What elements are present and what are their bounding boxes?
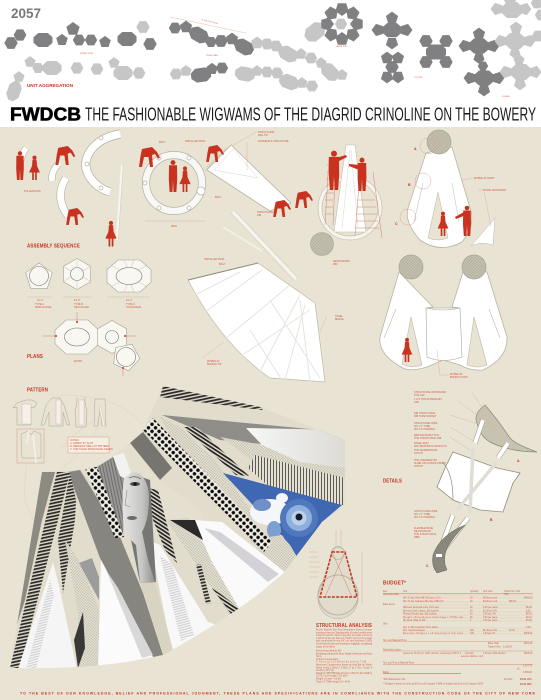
budget table: $480.00 xyxy=(524,598,533,600)
reinforced rim label: RIM xyxy=(333,263,338,266)
plan dimensions and labels: PENTAGONAL xyxy=(35,306,53,309)
details labels: STITCH xyxy=(414,452,423,455)
budget table: x2 xyxy=(517,668,520,670)
details labels: FLEXIBLE BASE xyxy=(414,527,433,530)
structural text block: Trend Specific ratio and resulting is negligible, considering xyxy=(316,642,373,646)
budget table: Fabrication Labor xyxy=(383,648,401,652)
skirt fan pattern: INSTALLED RING xyxy=(204,258,224,261)
plans: three unit plans xyxy=(26,259,151,292)
details labels: RIB STRUCTURAL xyxy=(414,412,436,415)
title: FWDCB xyxy=(10,104,81,124)
details labels: THE STRUCTURAL RIB xyxy=(414,437,442,440)
dark stripes near face xyxy=(150,488,177,563)
pattern note xyxy=(68,437,113,453)
details: shape C xyxy=(432,525,465,573)
pole with woman figure xyxy=(105,165,123,246)
double tent: ZIPPED-IN xyxy=(450,373,463,376)
budget table: 20 xyxy=(470,614,473,616)
skirt fan pattern xyxy=(188,258,344,385)
budget table: 1.00 per 1000 stitches xyxy=(483,652,506,655)
budget table: $1.00 per ON xyxy=(483,629,497,632)
structural diagram xyxy=(309,530,362,619)
details labels: THE STRUCTURAL xyxy=(414,533,437,536)
budget table: $300.00 xyxy=(524,633,533,635)
structural poles: RIB xyxy=(257,214,262,217)
complete ring with figures: RING xyxy=(171,225,177,228)
budget table: W.F. 8" dia. Stainless Bio-Steel HB4 8 ft xyxy=(403,600,444,603)
big arc segment xyxy=(85,134,120,192)
budget table: Base Total xyxy=(488,642,499,645)
model brow xyxy=(129,477,141,479)
details: panel B xyxy=(437,448,520,513)
budget table: 3.00 per piece xyxy=(483,616,498,619)
plan dimensions and labels: TYPE A xyxy=(35,303,44,306)
budget table: W.F. in 4lbs Industrial Scrim Fabric xyxy=(403,626,439,629)
details labels: 1 1/4" TRUSS BRACKET xyxy=(414,398,443,401)
label: pulled ring: PULLED RING xyxy=(24,190,41,193)
beige main band xyxy=(130,443,160,480)
budget table: W.F. Grommet Eyelet xyxy=(403,629,425,632)
plan dimensions and labels: 14'-0" xyxy=(74,299,80,302)
budget table: Unit Cost xyxy=(483,590,493,593)
budget table: Tax, and Time & Material Price xyxy=(383,662,415,664)
small dark stripe wedge xyxy=(212,588,238,614)
skirt fan pattern: BOLT xyxy=(219,263,226,266)
plan dimensions and labels: OCTAGONAL xyxy=(126,306,142,309)
budget table: Total Cost / Unit xyxy=(504,590,521,593)
left gray band xyxy=(17,472,55,624)
ring annotations: BOLT xyxy=(215,196,222,199)
structural text block: Uniform Compression: xyxy=(316,658,339,661)
structural text block: tested in tension. Skirts may offer to resists a force of xyxy=(316,634,372,637)
details labels: PANEL SKIN xyxy=(414,442,429,445)
budget table: 30 xyxy=(470,617,473,619)
details labels: STITCH xyxy=(414,465,423,468)
budget table: 3.00 per ON xyxy=(483,612,496,616)
budget table: 3,569.00 xyxy=(523,672,533,674)
budget table: *WP Material Per Unit xyxy=(383,678,406,681)
heading: pattern: PATTERN xyxy=(27,388,48,394)
reinforced disc label: REINFORCED xyxy=(333,260,350,263)
budget footnote: ** Budget is based on unit cap $1 for unit 4 square ft 98% of budget used for unit 5 square 100% xyxy=(383,682,483,686)
details labels: CAP xyxy=(414,401,419,404)
clothing pattern diagrams xyxy=(13,395,143,540)
street chain dark xyxy=(169,21,256,83)
light checker band upper xyxy=(220,437,345,478)
budget totals: $135,880 xyxy=(520,682,532,686)
details labels: NO 1 3" TUBE xyxy=(414,425,430,428)
details labels: THE CAP xyxy=(414,394,425,397)
details labels: B xyxy=(490,518,493,522)
budget table: $4.00 per unit xyxy=(483,600,497,603)
central cone with ladders and men xyxy=(310,145,382,256)
budget table: assume stitches / unit xyxy=(461,655,483,658)
cone annotations xyxy=(232,131,289,170)
structural text block: Weight of Layer = 25 lbs xyxy=(316,678,342,680)
vertical stripe panel xyxy=(248,455,345,505)
budget table: 0.00 xyxy=(526,627,531,629)
gray band under top xyxy=(162,415,341,444)
skirt fan pattern: STEEL xyxy=(335,315,344,318)
plan dimensions and labels xyxy=(27,297,150,309)
budget table: 3.00 per piece xyxy=(483,606,498,609)
budget table: TBD xyxy=(504,594,509,596)
dark wedge xyxy=(74,612,85,668)
budget table: 0.00 xyxy=(526,610,531,612)
tent with details A B C xyxy=(395,130,507,248)
structural text block: and completing the ring 3/4" rod. and structure (1,000) xyxy=(316,640,372,643)
year label: 2057 xyxy=(11,5,41,21)
plan dimensions and labels: TYPE C xyxy=(126,303,135,306)
skirt fan pattern: ZIPPED-IN xyxy=(207,360,220,363)
structural text block: F. Force is 0.13 kN/m2 by unit for 7 kW xyxy=(316,661,367,664)
white gradient shape xyxy=(246,428,345,468)
structural text block: Shear Using 1 kN/m2 / 2.500x, 3" by 1.75x, 7 long / 4 xyxy=(316,666,373,669)
tapered cone assembly xyxy=(205,145,313,217)
model eye xyxy=(130,482,140,486)
beige wedge under neck xyxy=(140,581,173,655)
budget table: 1,427.75 xyxy=(523,666,533,668)
details labels: STRUCTURAL RIB BOLTED xyxy=(414,391,446,394)
light cluster far right xyxy=(491,0,541,90)
combined plan: ENTRY xyxy=(74,360,83,363)
double tent xyxy=(380,255,507,379)
small street labels: CLUSTER xyxy=(414,77,423,79)
budget table: 400 xyxy=(470,630,475,632)
details labels: NO 2 3" FRAMING xyxy=(414,428,435,431)
dark triangle near neck xyxy=(170,520,203,540)
budget table: All Units xyxy=(504,678,513,681)
budget table: $80.00 xyxy=(509,601,517,603)
street chain light xyxy=(170,19,348,92)
middle white wedge xyxy=(98,560,153,668)
structural text block: 10.75) / at (in length / 100 kNm xyxy=(316,675,348,678)
details labels: ARC BRACKET FOR BOLTS xyxy=(414,445,447,448)
double tent: BONING HOOK xyxy=(450,376,468,379)
white header band xyxy=(0,0,541,127)
details labels: THE OVERSEW OR xyxy=(414,459,437,462)
budget table: 00.00 xyxy=(509,630,515,632)
hatch band lower xyxy=(166,518,243,620)
budget table: Base fit-out xyxy=(383,603,395,606)
details labels: WEFTED BI-BUTTON xyxy=(414,434,439,437)
dots band large xyxy=(143,418,272,552)
lower right white wedge xyxy=(193,520,285,610)
budget table: Quantity xyxy=(470,590,479,593)
budget table: Battle xyxy=(383,671,390,674)
structural text block: By the Wichita Two-Tone Membrane Stress Contour xyxy=(316,628,372,632)
budget table: 2 xyxy=(470,620,472,622)
budget table: 1,186.00 xyxy=(503,646,513,648)
structural text block: 10-20 by 10.5 (4) xyxy=(316,670,334,672)
budget table: Die Deck / Bag of 100 xyxy=(403,620,426,622)
photo of model: hair behind face and neck shadow xyxy=(122,470,156,583)
budget table: 20 xyxy=(470,598,473,600)
small street labels: STREET WALL xyxy=(206,54,218,57)
combined plan xyxy=(43,312,144,376)
plan dimensions and labels: 21'-0" xyxy=(126,299,132,302)
unit aggregation diagrams, left cluster xyxy=(4,22,157,50)
structural text block: Total of 7 TMB's length 10 = 64 lb xyxy=(316,680,351,683)
tent with details A B C: A xyxy=(414,147,417,151)
cone annotations: RAIL TIP xyxy=(258,134,268,137)
complete ring with figures xyxy=(139,147,205,228)
budget table: W.F. 6" dia. Steel HB 760 (ave.) 12 ft xyxy=(403,596,441,600)
details labels: SLIDE OR CANVAS PROOF xyxy=(414,462,447,465)
budget table: $9.00 per unit xyxy=(483,596,497,600)
details labels: NO 1 3" TUBE xyxy=(414,513,430,516)
assembly sequence: first arcs with figures xyxy=(16,146,84,225)
small street labels: 75' BOLSTER TRAIN xyxy=(201,18,219,25)
budget table: $421.25 xyxy=(524,643,533,645)
structural text block: Bendaring ceiling of the Dray: Height of structure and force xyxy=(316,652,373,655)
narrow stripes inner xyxy=(58,472,76,593)
gray diagonal big band xyxy=(68,470,163,657)
structural text block: Maximum Compressive stress by both Bar for Wider xyxy=(316,664,372,666)
details: shape A xyxy=(476,405,537,452)
black dash strip xyxy=(196,564,211,604)
pattern note: A. FABRIC BY SLOT xyxy=(70,442,94,445)
budget table xyxy=(383,590,533,681)
left black stripes xyxy=(10,472,70,668)
photo of model: face and neck xyxy=(122,472,155,583)
budget table: 124,000 xyxy=(465,653,474,655)
budget table: $425.00 xyxy=(524,653,533,655)
details labels: THE WATERPROOF xyxy=(414,449,438,452)
budget table: Remnant Chipper / 10 Openings 6 mm wide xyxy=(403,632,464,635)
skirt fan pattern: BRACE xyxy=(335,318,344,321)
cross and cluster diagrams xyxy=(372,12,504,96)
model lips xyxy=(127,516,137,520)
small street labels: LARGE TENT xyxy=(336,45,348,48)
pattern note: B. REMNANT PRE-CUT PATTERN xyxy=(70,445,109,448)
structural text block: shape of the skirts. xyxy=(316,645,336,648)
model nose xyxy=(125,490,130,507)
details labels: STRUCTURAL RIBS xyxy=(414,510,438,513)
tent with details A B C: C xyxy=(395,222,398,226)
structural text block: Weight of 1 BM TMB wide 12" bars / 2 Ply HI 1.00x 10/16 by xyxy=(316,672,373,675)
hair highlight xyxy=(113,453,131,478)
details labels: RE-PRODUCE xyxy=(414,530,431,533)
heading: details: DETAILS xyxy=(383,478,402,484)
budget table: Total w/ Wet xyxy=(488,646,501,648)
narrow dots band xyxy=(85,467,124,538)
budget table: 100 xyxy=(470,633,475,635)
budget totals: $136,252 xyxy=(520,677,532,681)
budget table: Item xyxy=(383,590,388,593)
budget table: Tax, and Material Price xyxy=(383,639,407,642)
details: tubes xyxy=(438,420,508,557)
structural poles xyxy=(223,211,298,280)
details labels: RIBS xyxy=(414,536,420,539)
pattern note: C. USE SCALE WHEN MAKE SEAMS xyxy=(70,448,113,451)
budget table: $5.00 xyxy=(526,614,532,616)
structural text block: Determining Variants 6B: xyxy=(316,650,342,652)
footer statement: TO THE BEST OF OUR KNOWLEDGE, BELIEF AND PROFESSIONAL JUDGMENT, THESE PLANS AND SPECIFICATIONS ARE IN COMPLIANCE WITH THE CONSTRUCTION CODE OF THE CITY OF NEW YORK xyxy=(20,692,535,696)
white stripe wedge xyxy=(154,542,215,650)
heading: structural analysis: STRUCTURAL ANALYSIS xyxy=(316,623,372,629)
beige checker wide band xyxy=(160,417,258,520)
details labels: RIB TUBE SOCKET xyxy=(414,415,437,418)
black stripe band xyxy=(183,427,249,476)
heading: unit aggregation: UNIT AGGREGATION xyxy=(27,83,73,88)
plan dimensions and labels: TYPE B xyxy=(74,303,83,306)
collage crinoline fan xyxy=(10,386,345,668)
budget table: Structural Labs xyxy=(383,593,399,596)
plan dimensions and labels: 12'-0" xyxy=(37,299,43,302)
budget table: Sewed at 15-25 per 1000 stitches, assuming 124577 s xyxy=(403,652,462,655)
structural text block: Force xyxy=(316,655,323,658)
left white wedge xyxy=(18,562,77,670)
heading: assembly sequence: ASSEMBLY SEQUENCE xyxy=(27,244,80,250)
tent with details A B C: WOOD HOOPSKIRT xyxy=(483,189,507,192)
photo of model: hair xyxy=(97,457,125,538)
budget table: 20 xyxy=(470,601,473,603)
budget totals xyxy=(520,677,532,686)
budget table: Pressed Anchor tap, 160 sockets xyxy=(403,612,437,616)
budget table: 3.00 per piece xyxy=(483,619,498,622)
small street labels xyxy=(80,18,510,98)
top dark stripe band xyxy=(160,386,264,410)
budget table: Weight / Polyethylene Sack Cage / 775lbs cap xyxy=(403,616,464,619)
budget table: Unit xyxy=(403,590,407,593)
budget table: 20 xyxy=(470,607,473,609)
budget table: $5.00 xyxy=(526,607,532,609)
budget table: Mana Ex structural roofs, PVC tape xyxy=(403,606,440,609)
pattern note: NOTES xyxy=(70,439,79,442)
structural text block: technique from the Teaching side of tested models were xyxy=(316,631,373,634)
details labels: STRUCTURAL RIBS xyxy=(414,422,438,425)
bolster dimension line xyxy=(170,17,246,33)
beige checker middle wedge xyxy=(65,540,100,668)
details labels: A xyxy=(517,459,520,463)
ring annotations xyxy=(159,140,222,199)
budget table: $1.00 per ON xyxy=(483,610,497,612)
small street labels: STREET SPINE xyxy=(80,53,94,55)
details labels: NO 2 3" FRAMING xyxy=(414,516,435,519)
skirt fan pattern: BONING TIP xyxy=(207,363,222,366)
small photo scrap xyxy=(79,558,99,600)
ring cluster xyxy=(321,3,363,45)
cone annotations: SCREENS & STRUCTURE xyxy=(258,140,289,143)
budget table: Bernina Cable Clasps, 100 sockets xyxy=(403,610,440,612)
cone annotations: STRUCTURAL xyxy=(258,131,275,134)
details labels xyxy=(414,391,520,568)
tent with details A B C: B xyxy=(408,183,411,187)
small street labels: SQUARE xyxy=(502,95,510,98)
structural text block xyxy=(316,628,373,683)
budget table: 1.00 per ST xyxy=(483,632,496,635)
budget table: Skin xyxy=(383,624,388,626)
plan dimensions and labels: HEXAGONAL xyxy=(74,306,90,309)
light unit aggregation, left cluster xyxy=(4,21,150,103)
gradient streak strip xyxy=(130,432,172,480)
details labels: C xyxy=(426,564,429,568)
structural poles: STRUCTURAL xyxy=(257,211,274,214)
tent with details A B C: ZIPPED-IN SKIRT xyxy=(474,177,495,180)
heading: budget: BUDGET* xyxy=(383,580,406,586)
ring annotations: BOLT xyxy=(159,141,166,144)
structural text block: 1,000 lb at the top after a 1.75x30" spring 12 ft length xyxy=(316,637,373,640)
heading: plans: PLANS xyxy=(27,354,43,360)
budget table: 40 xyxy=(470,610,473,612)
budget table: $3.00 xyxy=(526,620,532,622)
blue flower panel xyxy=(223,473,342,557)
model iris xyxy=(133,482,137,486)
budget table: $2.10 xyxy=(526,617,532,619)
ring annotations: INSTALLED RING xyxy=(185,140,205,143)
